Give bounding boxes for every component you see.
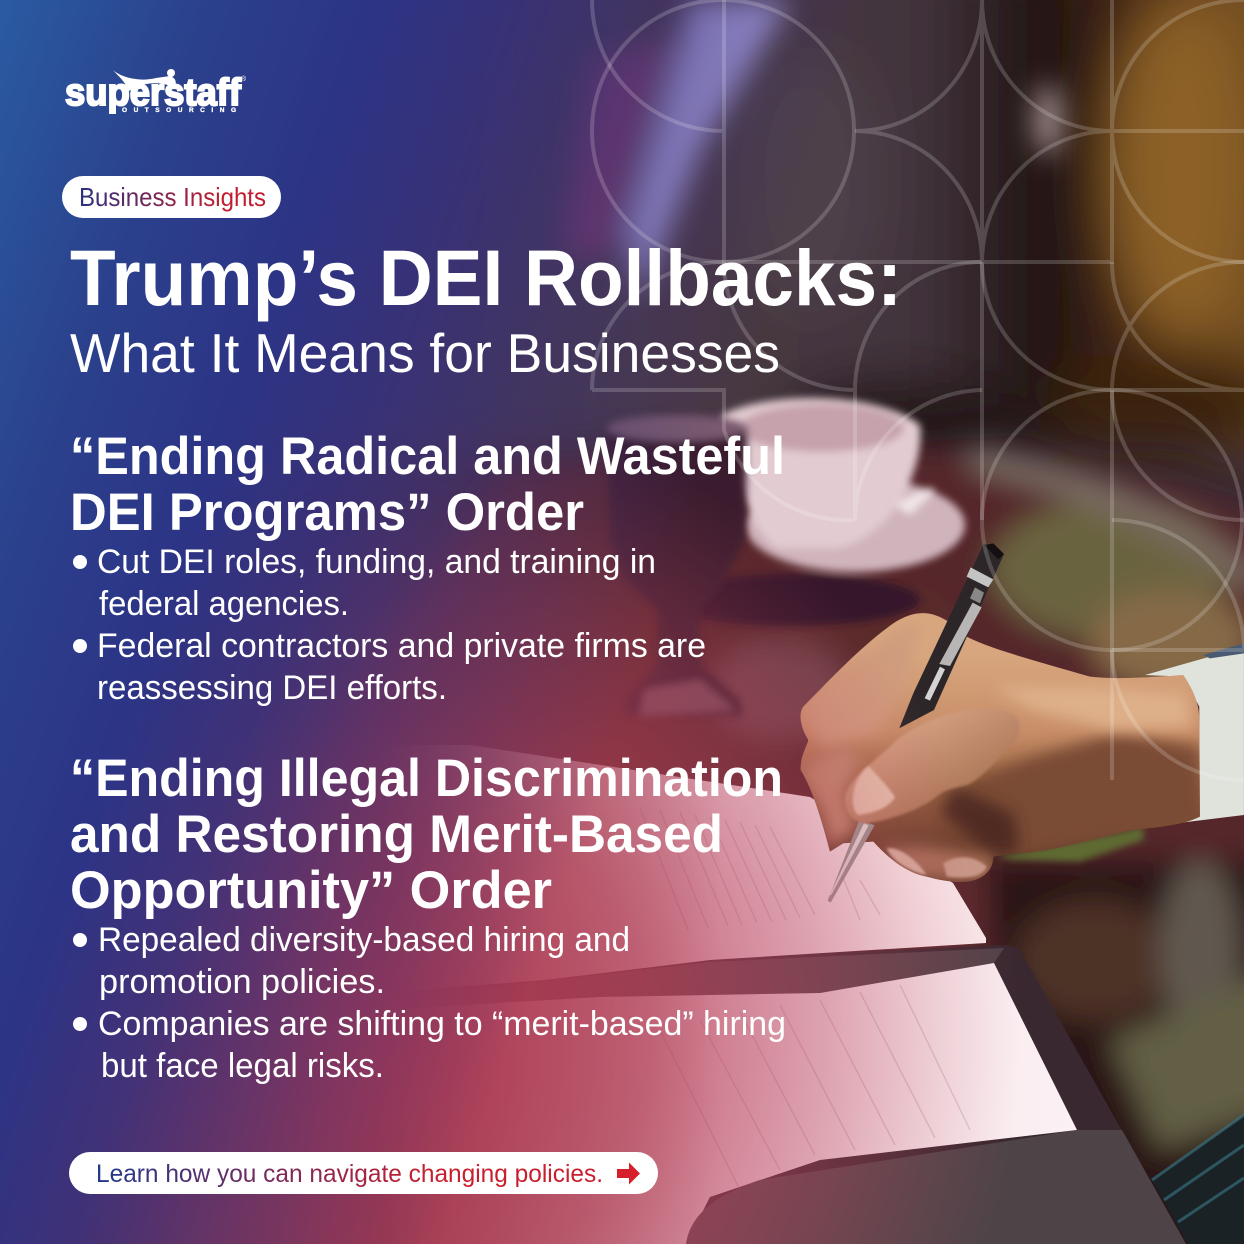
section 1: Ending Radical and Wasteful DEI Programs order [70,427,785,707]
section 2 bullets [73,921,786,1085]
section 1 heading: DEI Programs” Order [70,483,584,542]
registered mark: ® [241,75,247,83]
fingernails [887,848,927,875]
section 2 heading: and Restoring Merit-Based [70,805,723,864]
main heading: Trump’s DEI Rollbacks: [70,233,902,322]
hand holding pen [800,543,1244,903]
dark glass [607,415,747,716]
section 2 heading: “Ending Illegal Discrimination [70,749,783,808]
coffee cup and saucer [660,398,965,626]
blurred wall and jacket [0,0,1244,460]
folder strip and right edge [678,945,1122,1210]
papers and folder, fading into the gradient [438,745,1122,1244]
thumb [845,708,1020,823]
printed lines on paper [640,808,970,1190]
logo swoosh [113,70,176,92]
call to action label: Learn how you can navigate changing policies. [96,1160,603,1188]
green table reflection [997,827,1143,862]
section 1 heading [70,427,785,542]
section 1 bullets [73,543,706,707]
paper sheet 2 [380,963,1077,1244]
section 2 bullets: Companies are shifting to “merit-based” hiring [98,1005,786,1043]
logo wordmark: superstaff [65,72,241,114]
section 1 bullets: Federal contractors and private firms are [97,627,706,665]
section 2: Ending Illegal Discrimination order [70,749,786,1085]
icon: arrow [617,1162,640,1184]
tag pill: Business Insights [62,176,281,218]
tag label: Business Insights [79,182,266,212]
pen barrel [899,543,1004,728]
call to action pill [69,1152,658,1194]
blurred tie [560,0,1060,300]
paper sheet 1 [442,745,986,984]
section 1 bullets: Cut DEI roles, funding, and training in [97,543,656,581]
hand shading [800,620,1200,880]
section 2 bullets: Repealed diversity-based hiring and [98,921,630,959]
section 1 heading: “Ending Radical and Wasteful [70,427,785,486]
logo: Superstaff Outsourcing [65,69,247,114]
logo dot [167,69,175,77]
thumbnail [853,766,895,815]
section 1 bullets: federal agencies. [99,585,349,623]
section 2 heading: Opportunity” Order [70,861,552,920]
title [70,233,902,384]
hand [801,613,1200,882]
table surface [300,445,1244,1244]
section 2 bullets: but face legal risks. [101,1047,384,1085]
logo tagline: OUTSOURCING [122,107,236,114]
decorative line pattern [592,0,1244,780]
section 2 heading [70,749,783,920]
section 1 bullets: reassessing DEI efforts. [97,669,447,707]
folder pocket [686,1130,1186,1244]
section 2 bullets: promotion policies. [99,963,385,1001]
shirt cuff [1145,652,1244,823]
subtitle: What It Means for Businesses [70,322,780,384]
pen tip [828,820,875,903]
table stripes bottom right [1152,1115,1244,1244]
